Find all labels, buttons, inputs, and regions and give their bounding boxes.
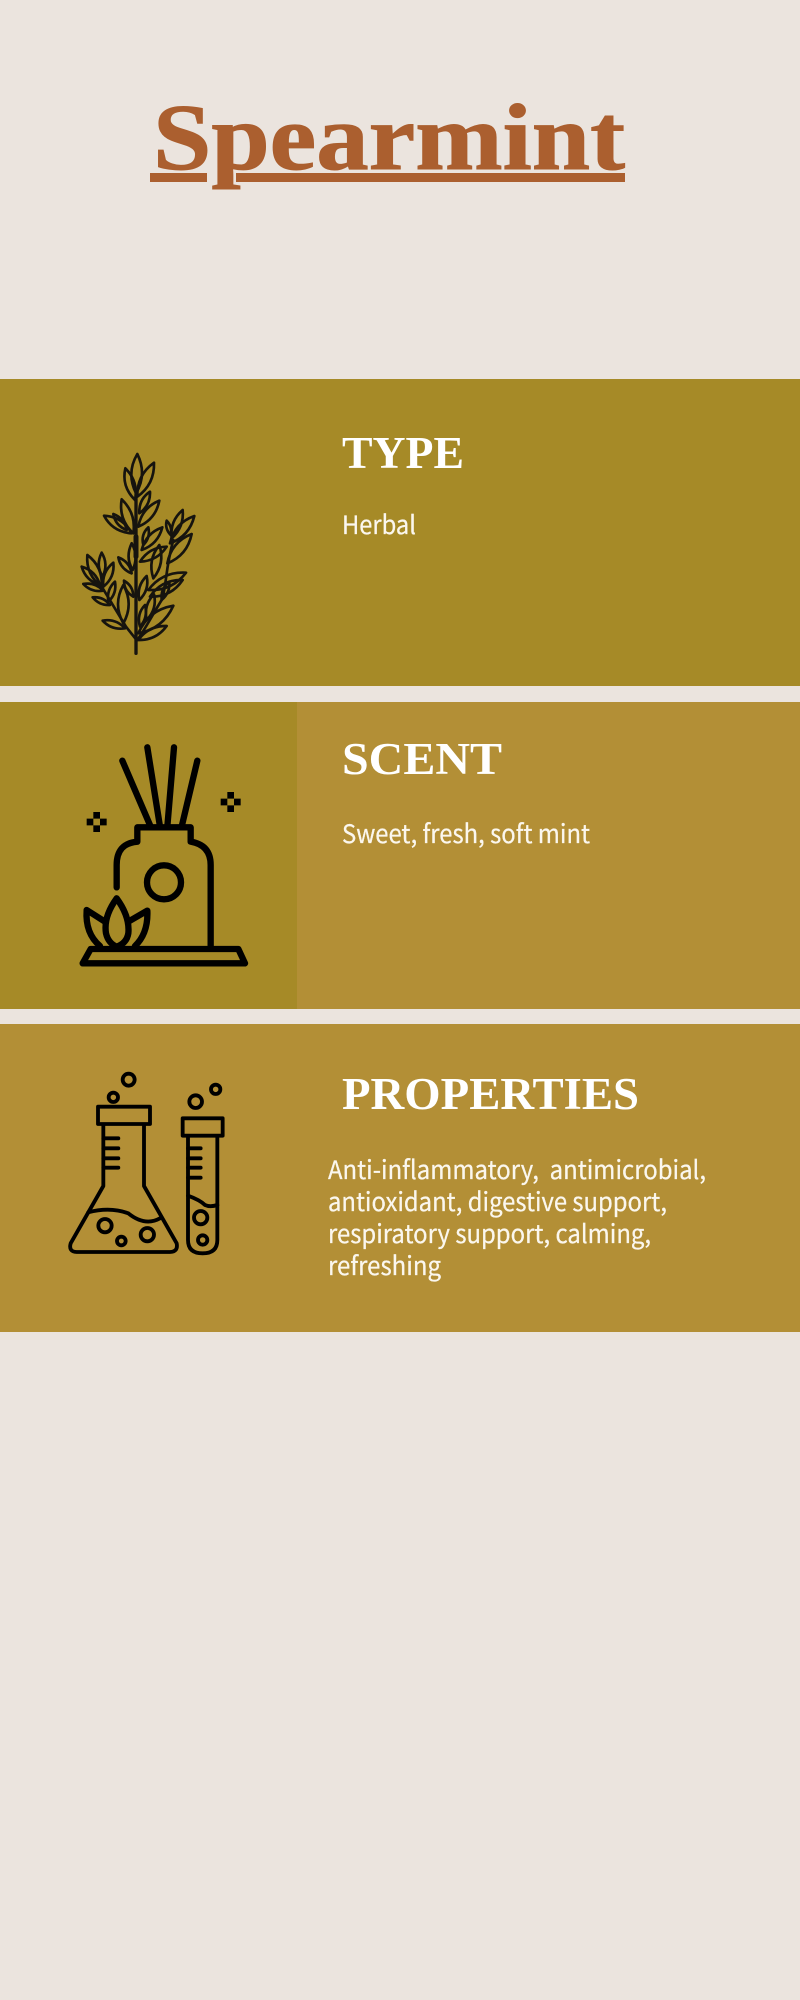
heading: scent: SCENT	[342, 734, 502, 784]
text: properties list: antioxidant, digestive support,	[328, 1182, 667, 1219]
icon: flask and test tube	[70, 1074, 223, 1253]
panel background: properties	[0, 1024, 800, 1332]
text: type value: Herbal	[342, 505, 416, 542]
panel background: type	[0, 379, 800, 686]
text: properties list: respiratory support, calming,	[328, 1214, 651, 1251]
panel: scent	[0, 702, 800, 1009]
text: properties list: Anti-inflammatory, antimicrobial,	[328, 1150, 706, 1187]
panel: properties	[0, 1024, 800, 1332]
text: scent value: Sweet, fresh, soft mint	[342, 814, 590, 851]
icon: reed diffuser	[83, 747, 245, 963]
icon panel: scent	[0, 702, 297, 1009]
icon: spearmint sprig	[82, 454, 194, 653]
text: properties list: refreshing	[328, 1246, 442, 1283]
panel background: scent	[0, 702, 800, 1009]
panel: type	[0, 379, 800, 686]
title: Spearmint	[153, 86, 625, 190]
heading: type: TYPE	[342, 428, 464, 478]
heading: properties: PROPERTIES	[342, 1069, 639, 1119]
text: properties list	[328, 1150, 706, 1283]
